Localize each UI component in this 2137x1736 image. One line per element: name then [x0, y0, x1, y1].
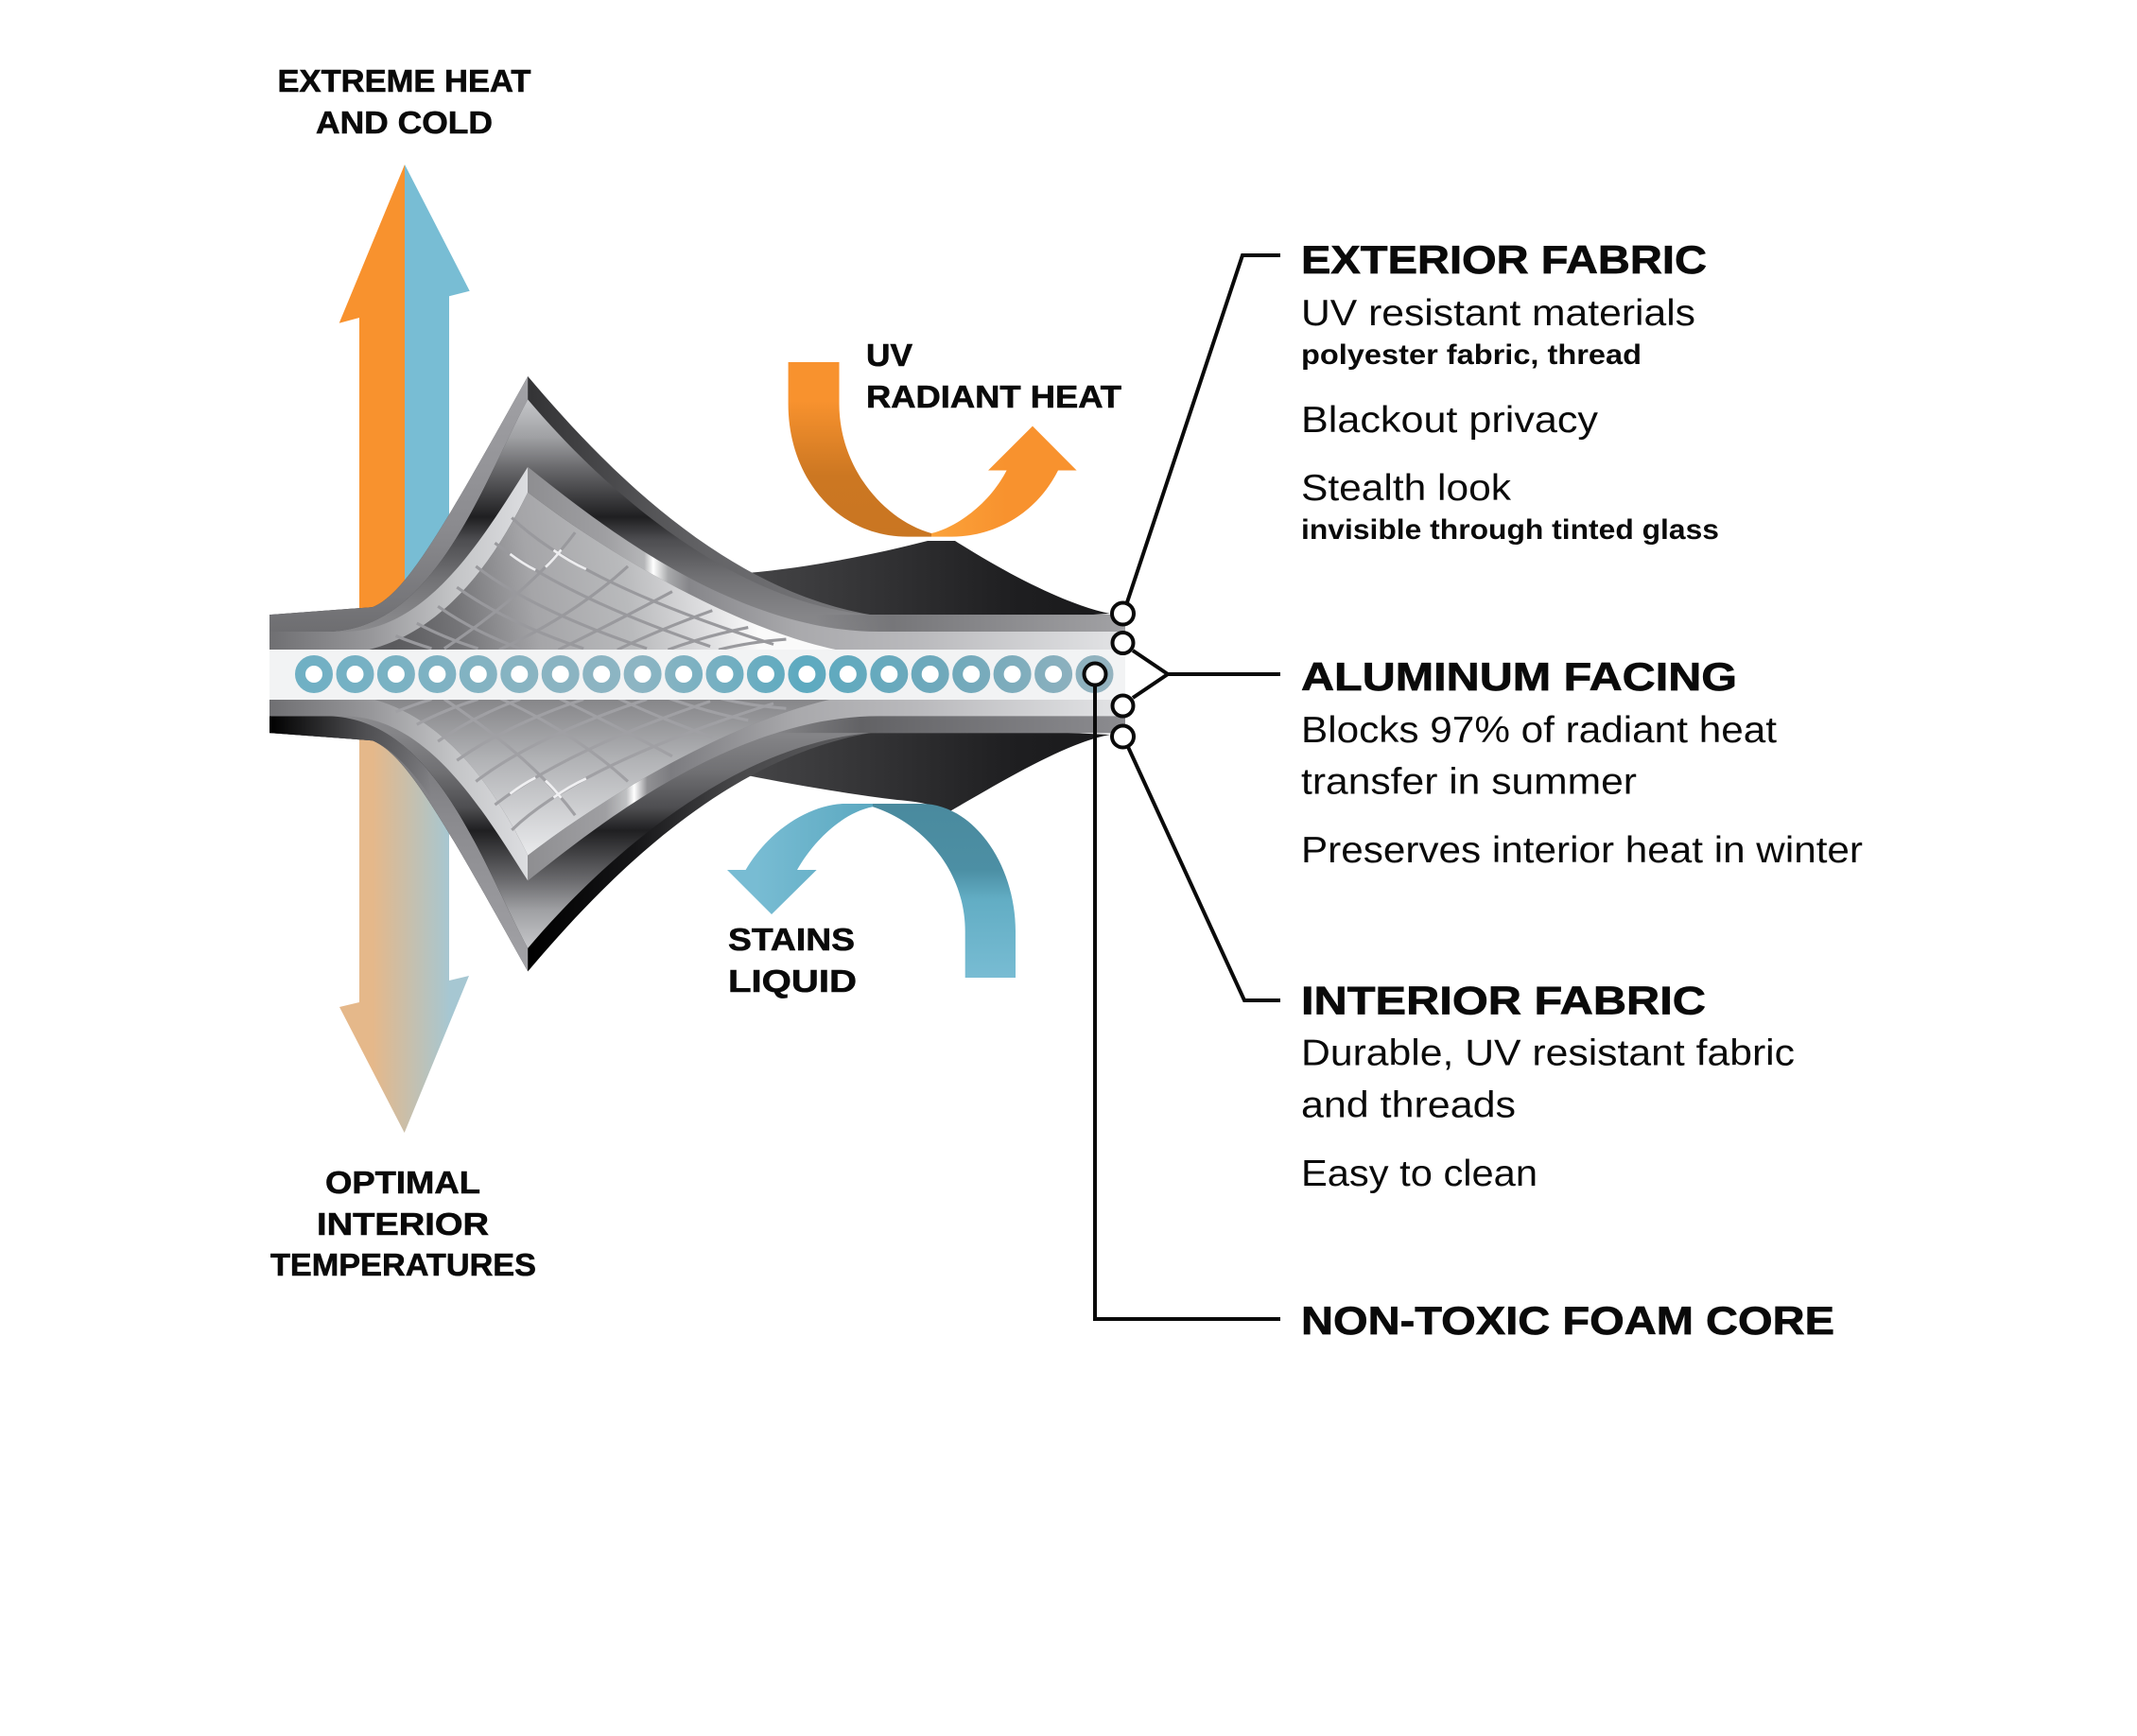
text block: transfer in summer: transfer in summer: [1301, 762, 1637, 802]
arrow: stains and liquid deflected: [727, 804, 1016, 978]
fabric: upper layers: [269, 376, 1125, 650]
arrow: extreme heat and cold up: [339, 165, 470, 624]
fabric: lower layers: [269, 698, 1125, 971]
text block: easy to clean: Easy to clean: [1301, 1154, 1538, 1194]
heading: interior fabric: INTERIOR FABRIC: [1301, 979, 1706, 1023]
panel: exterior fabric: [1301, 237, 1719, 546]
text block: blackout privacy: Blackout privacy: [1301, 400, 1599, 441]
label: UV radiant heat: [866, 338, 1121, 414]
label: stains liquid: STAINS: [728, 922, 855, 957]
heading: exterior fabric: EXTERIOR FABRIC: [1301, 237, 1707, 282]
heading: aluminum facing: ALUMINUM FACING: [1301, 654, 1737, 699]
text block: durable fabric: Durable, UV resistant fabric: [1301, 1033, 1795, 1074]
back layer: top dark fabric: [747, 541, 1110, 629]
label: UV radiant heat: RADIANT HEAT: [866, 379, 1121, 414]
label: optimal interior temperatures: TEMPERATURES: [270, 1247, 536, 1282]
label: UV radiant heat: UV: [866, 338, 912, 373]
label: optimal interior temperatures: OPTIMAL: [325, 1165, 480, 1200]
label: stains liquid: [728, 922, 857, 998]
callout markers: [1084, 603, 1134, 747]
text block: polyester fabric, thread: polyester fabric, thread: [1301, 339, 1642, 371]
arrow: optimal interior temperatures down: [339, 728, 469, 1133]
foam core strip: [269, 650, 1125, 700]
text block: UV resistant materials: UV resistant materials: [1301, 293, 1695, 334]
label: optimal interior temperatures: INTERIOR: [317, 1207, 489, 1241]
label: extreme heat and cold: AND COLD: [316, 105, 493, 140]
text block: preserves interior heat: Preserves interior heat in winter: [1301, 830, 1863, 871]
text block: and threads: and threads: [1301, 1085, 1516, 1126]
text block: blocks radiant heat: Blocks 97% of radiant heat: [1301, 710, 1777, 751]
callout lines: [1095, 255, 1280, 1319]
foam core rings: [301, 660, 1108, 688]
label: extreme heat and cold: [278, 63, 531, 140]
panel: interior fabric: [1301, 979, 1795, 1194]
text block: invisible through tinted glass: invisible through tinted glass: [1301, 514, 1719, 546]
label: optimal interior temperatures: [270, 1165, 536, 1282]
label: stains liquid: LIQUID: [728, 963, 857, 998]
panel: aluminum facing: [1301, 654, 1863, 871]
label: extreme heat and cold: EXTREME HEAT: [278, 63, 531, 98]
back layer: bottom dark fabric: [747, 723, 1110, 812]
arrow: UV radiant heat deflected: [789, 362, 1077, 537]
heading: non-toxic foam core: NON-TOXIC FOAM CORE: [1301, 1298, 1834, 1343]
text block: stealth look: Stealth look: [1301, 468, 1512, 509]
